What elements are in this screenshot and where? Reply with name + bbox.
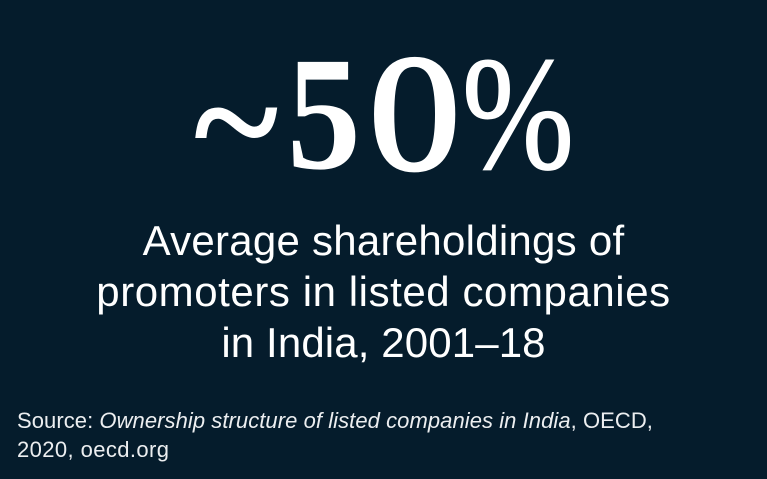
source note: Source: Ownership structure of listed companies in India, OECD, — [17, 408, 653, 433]
big number — [194, 21, 574, 212]
description text: Average shareholdings of — [143, 217, 624, 264]
description text: promoters in listed companies — [96, 268, 671, 315]
description text — [96, 217, 671, 366]
big number: 0 — [369, 21, 460, 205]
big number: % — [462, 25, 574, 204]
source note — [17, 408, 653, 462]
big number: 5 — [287, 25, 361, 204]
description text: in India, 2001–18 — [221, 319, 546, 366]
source note: 2020, oecd.org — [17, 437, 169, 462]
big number: ~ — [194, 33, 278, 212]
